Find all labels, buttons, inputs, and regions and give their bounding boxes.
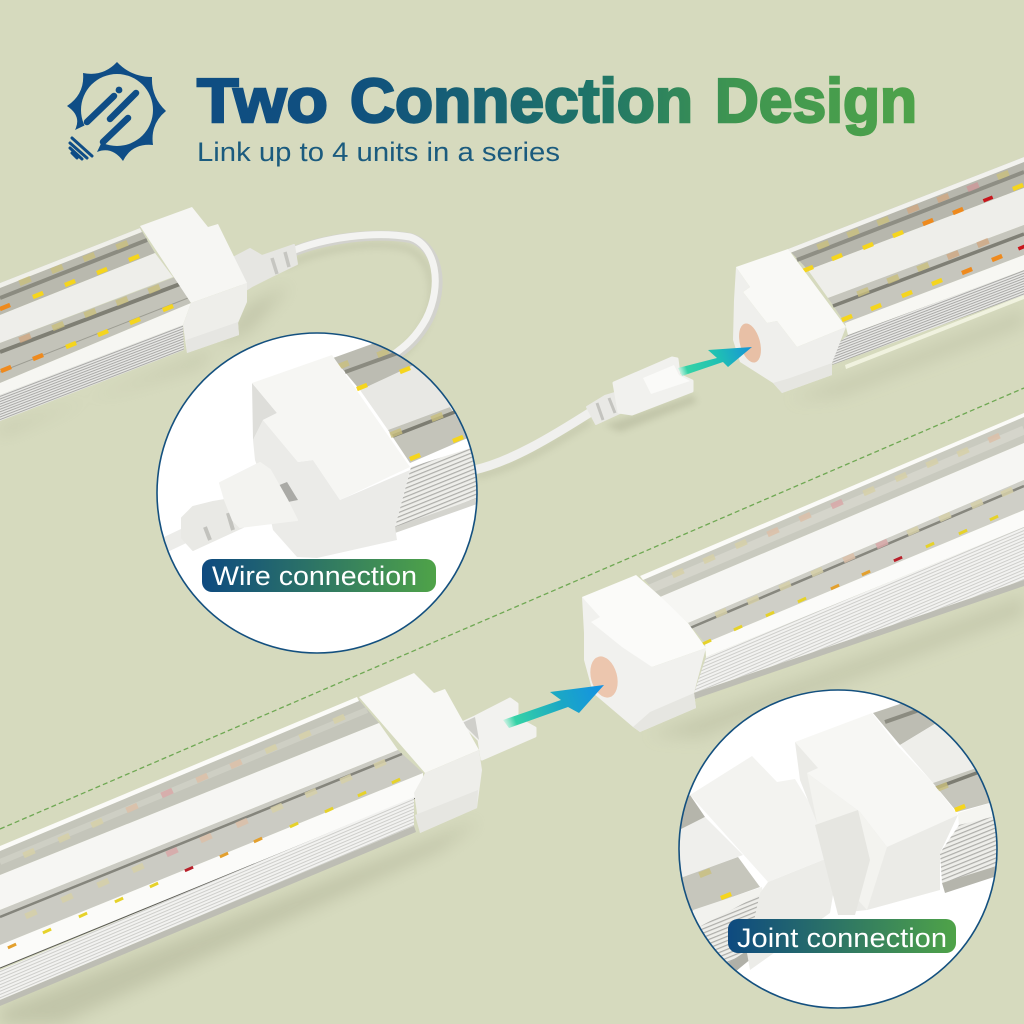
channel lower	[0, 277, 191, 383]
fins	[0, 325, 184, 421]
end cap	[582, 597, 706, 732]
plug	[231, 245, 297, 291]
label: wire connection: Wire connection	[212, 561, 417, 591]
right cap	[795, 742, 958, 913]
rail	[0, 303, 191, 395]
end cap in close-up	[253, 420, 410, 558]
end cap	[733, 267, 846, 393]
LEDs	[0, 240, 174, 373]
panel: wire connection close-up	[150, 333, 480, 653]
label: joint connection: Joint connection	[737, 923, 947, 953]
thin cream edge	[845, 295, 1024, 369]
socket hole	[586, 653, 622, 701]
title	[197, 67, 917, 136]
strain relief	[587, 393, 622, 424]
lamp: top left with cable	[0, 207, 438, 435]
lamp: top right	[733, 157, 1024, 400]
LEDs	[671, 433, 1014, 645]
prong plug	[462, 699, 535, 759]
panel: joint connection close-up	[675, 690, 1000, 1008]
arrow: upper	[678, 347, 752, 376]
subtitle: Link up to 4 units in a series	[197, 137, 560, 167]
title: Connection	[350, 67, 693, 136]
channel upper	[0, 228, 155, 315]
socket hole	[735, 321, 765, 365]
left cap	[747, 860, 833, 970]
end cap	[359, 673, 479, 773]
title: Two	[197, 67, 328, 136]
connector plug with cable	[474, 358, 697, 476]
end cap	[140, 207, 247, 303]
title: Design	[715, 67, 917, 136]
lamp: bottom right	[582, 413, 1024, 738]
cable	[290, 236, 438, 358]
plug head	[614, 358, 692, 414]
LEDs	[7, 714, 401, 949]
plug in close-up	[164, 529, 186, 551]
arrow: lower	[503, 685, 604, 728]
reflector white band	[0, 253, 173, 343]
dashed divider line	[0, 388, 1024, 829]
lamp: bottom left	[0, 673, 535, 1024]
LEDs	[802, 170, 1024, 322]
icon: light bulb sun	[67, 62, 166, 161]
